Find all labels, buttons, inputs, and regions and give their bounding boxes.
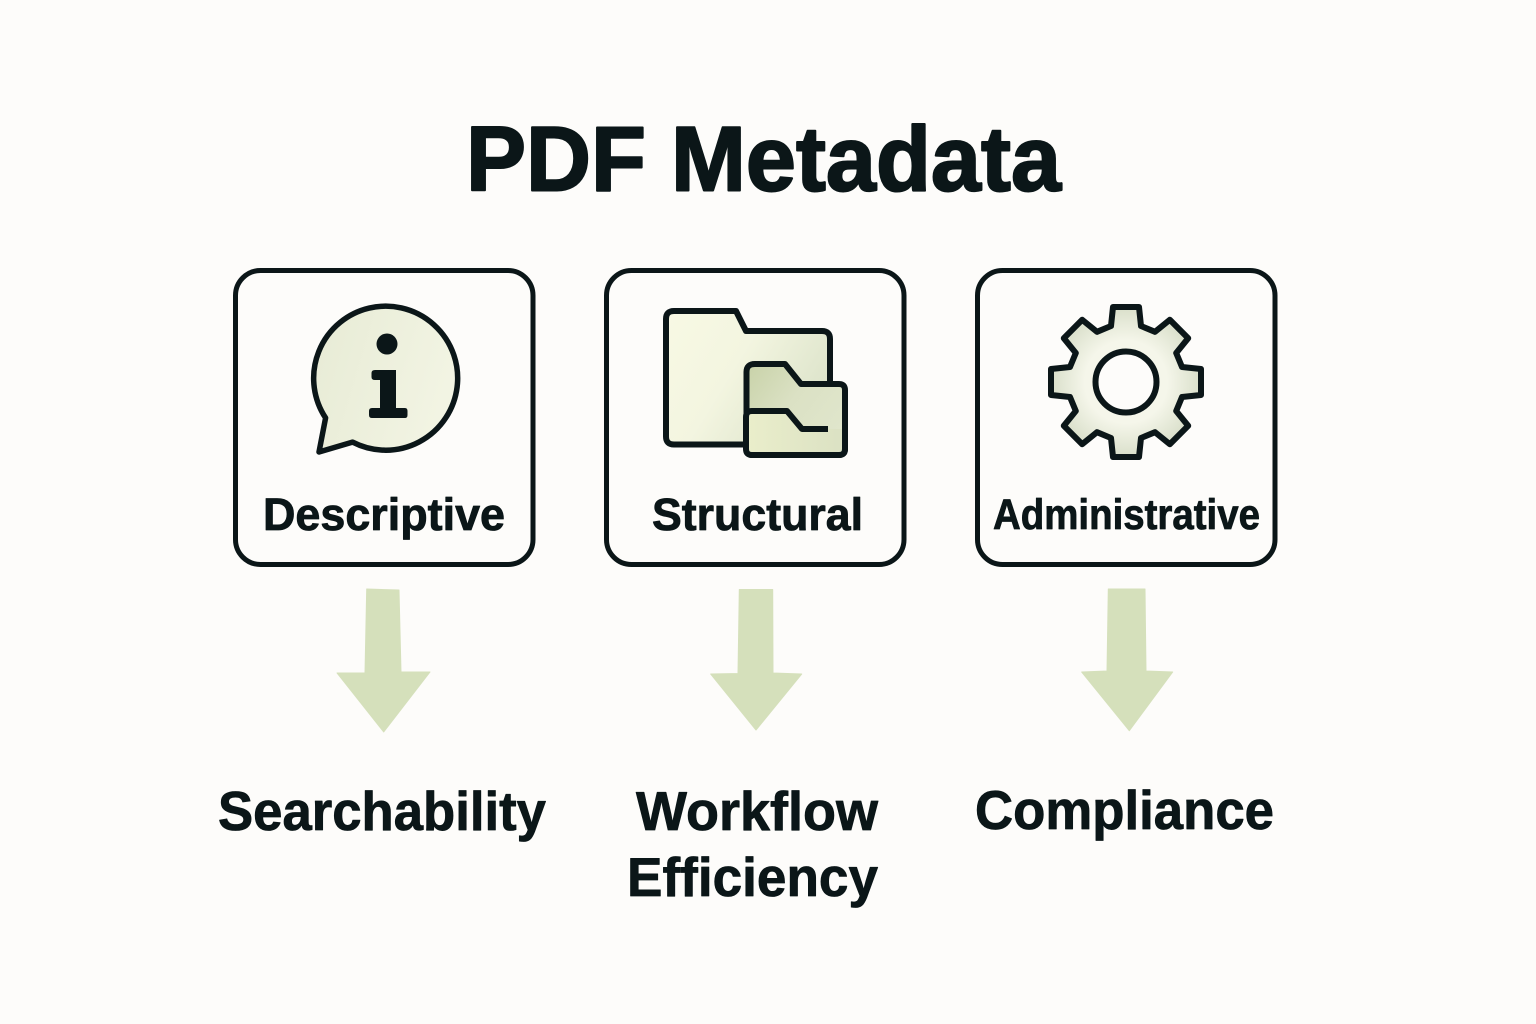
arrow: structural to workflow efficiency — [711, 590, 802, 730]
panel: descriptive — [236, 270, 533, 564]
label: descriptive: Descriptive — [263, 489, 505, 540]
title: PDF Metadata — [466, 108, 1062, 210]
icon: nested folders — [666, 311, 845, 455]
panel: structural — [606, 270, 904, 564]
icon: info speech bubble — [314, 306, 458, 452]
outcome: workflow efficiency: Efficiency — [627, 846, 878, 908]
icon: gear — [1051, 307, 1201, 457]
card outline — [606, 270, 904, 564]
arrow: administrative to compliance — [1082, 589, 1173, 731]
label: structural: Structural — [652, 489, 863, 540]
outcome: searchability: Searchability — [218, 780, 546, 842]
label: administrative: Administrative — [993, 491, 1260, 539]
card outline — [978, 270, 1275, 564]
outcome: workflow efficiency: Workflow — [636, 780, 878, 842]
outcome: compliance: Compliance — [975, 779, 1274, 841]
outcome: workflow efficiency — [627, 780, 878, 908]
card outline — [236, 270, 533, 564]
panel: administrative — [978, 270, 1275, 564]
arrow: descriptive to searchability — [337, 589, 430, 732]
